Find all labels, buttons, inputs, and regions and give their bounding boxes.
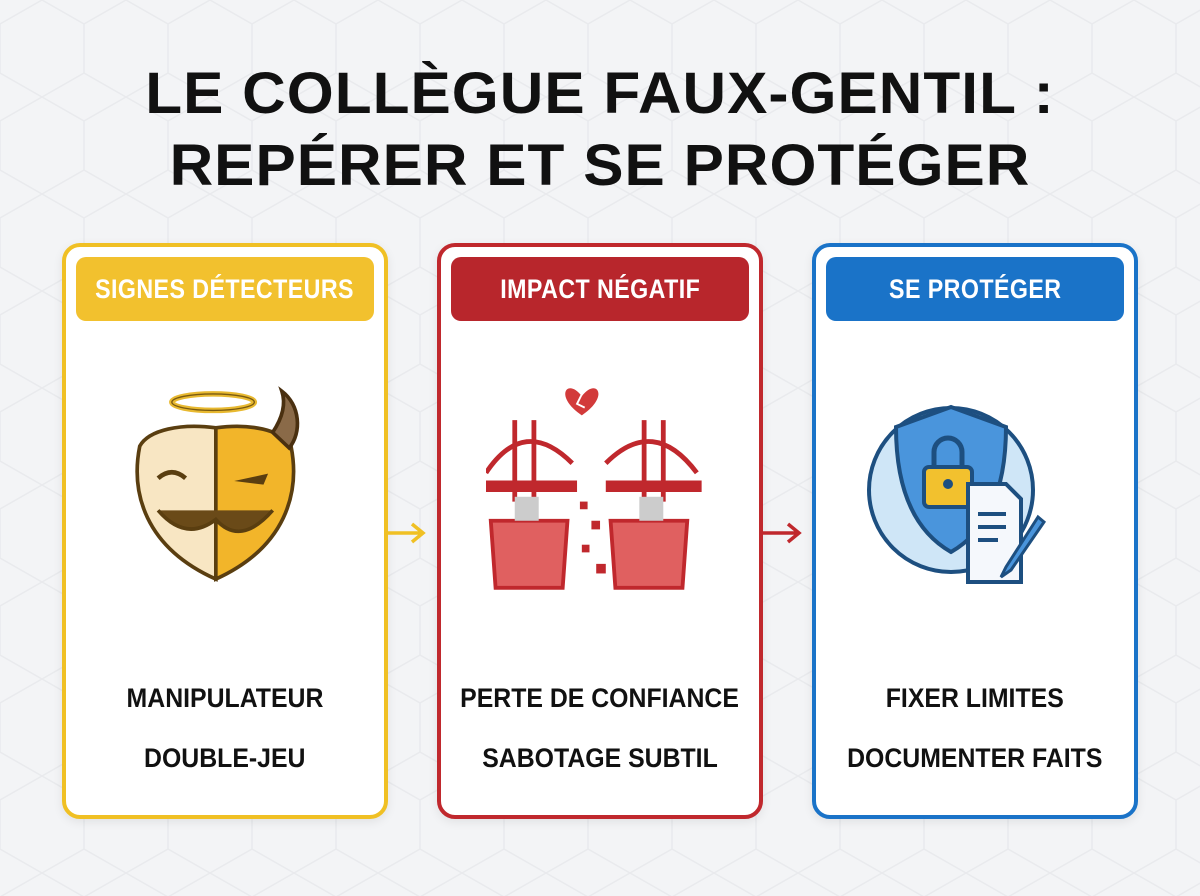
icon: two-faced mask: [135, 386, 300, 582]
text: documenter faits: DOCUMENTER FAITS: [847, 743, 1103, 773]
arrow 2: [763, 522, 802, 544]
text: double-jeu: DOUBLE-JEU: [144, 743, 306, 773]
icon: broken bridge: [486, 388, 702, 590]
header: se protéger: [826, 257, 1124, 321]
text: sabotage subtil: SABOTAGE SUBTIL: [482, 743, 718, 773]
header: signes détecteurs: SIGNES DÉTECTEURS: [96, 274, 354, 304]
text: manipulateur: MANIPULATEUR: [127, 683, 323, 713]
panel: signes détecteurs: [62, 243, 388, 819]
arrow 1: [388, 522, 426, 544]
title: [145, 61, 1055, 198]
text: fixer limites: FIXER LIMITES: [886, 683, 1064, 713]
header: se protéger: SE PROTÉGER: [889, 274, 1061, 304]
header: signes détecteurs: [76, 257, 374, 321]
icon: shield with lock and document: [867, 404, 1046, 584]
title: REPÉRER ET SE PROTÉGER: [170, 133, 1030, 198]
panel: impact négatif: [437, 243, 763, 819]
title: LE COLLÈGUE FAUX-GENTIL :: [145, 61, 1055, 126]
header: impact négatif: IMPACT NÉGATIF: [500, 274, 700, 304]
header: impact négatif: [451, 257, 749, 321]
text: perte de confiance: PERTE DE CONFIANCE: [461, 683, 739, 713]
panel: se protéger: [812, 243, 1138, 819]
